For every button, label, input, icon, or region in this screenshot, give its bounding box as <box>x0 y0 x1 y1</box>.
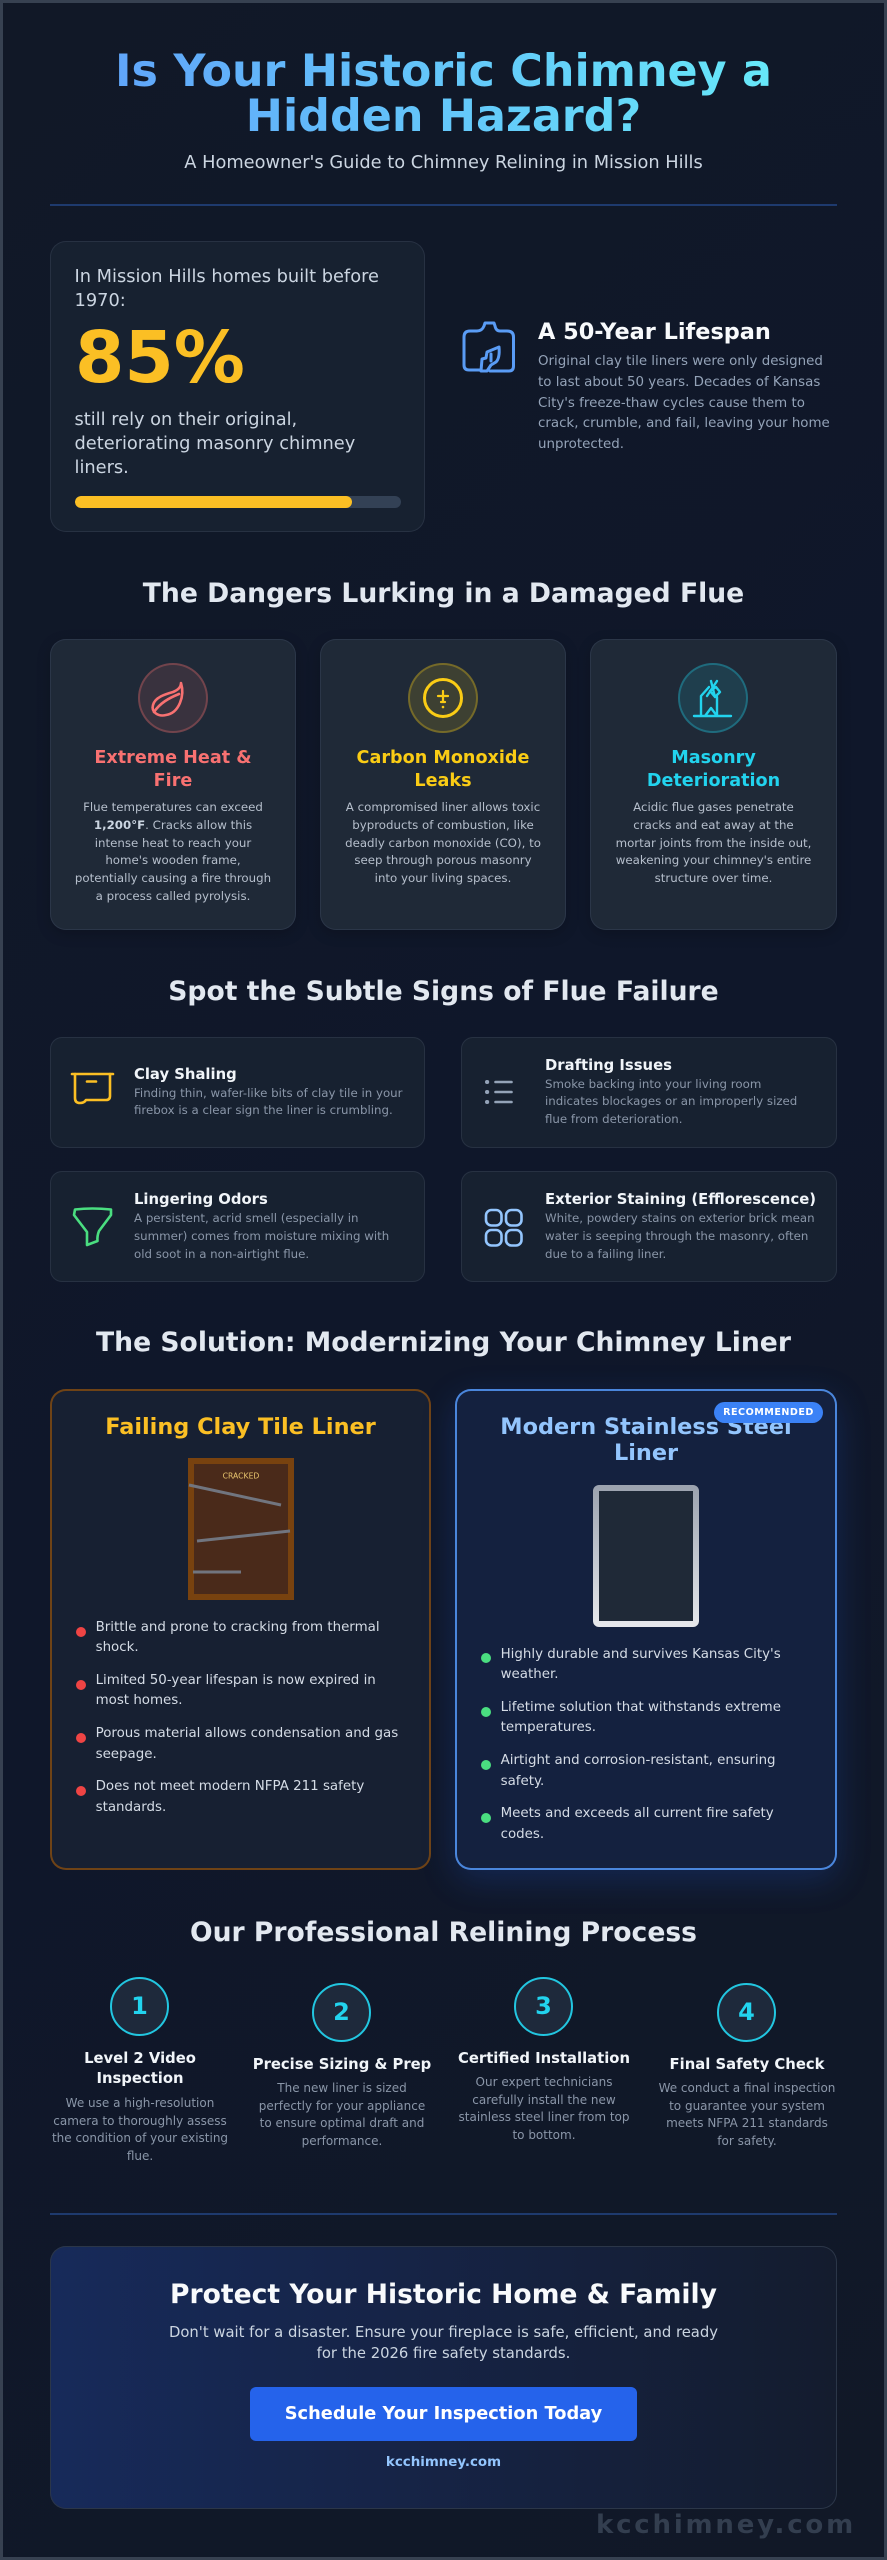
clay drawbacks list: Brittle and prone to cracking from thermal <box>96 1620 380 1634</box>
lifespan text <box>538 354 830 452</box>
odors text <box>134 1211 389 1260</box>
drafting text: flue from deterioration. <box>545 1112 683 1126</box>
step 3 number <box>514 1977 573 2036</box>
step 4 text <box>659 2081 835 2148</box>
step 1 text: We use a high-resolution <box>66 2096 214 2110</box>
step 4 text: We conduct a final inspection <box>659 2081 835 2095</box>
panel: 85% statistic <box>50 241 425 532</box>
icon: crumbling chimney <box>678 663 748 733</box>
odors text: old soot in a non-airtight flue. <box>134 1246 309 1260</box>
heat text: Flue temperatures can exceed <box>83 800 263 814</box>
step 1 <box>52 1977 228 2163</box>
lifespan text: City's freeze-thaw cycles cause them to <box>538 396 805 411</box>
heat text: 1,200°F. Cracks allow this <box>94 818 252 832</box>
watermark: kcchimney.com <box>596 2510 856 2540</box>
lifespan text: to last about 50 years. Decades of Kansas <box>538 375 820 390</box>
icon: funnel <box>72 1207 112 1246</box>
step 4 <box>659 1983 835 2148</box>
cta text <box>169 2324 718 2362</box>
heat text: intense heat to reach your <box>95 836 251 850</box>
odors text: A persistent, acrid smell (especially in <box>134 1211 359 1225</box>
masonry title: Deterioration <box>647 771 780 791</box>
step 3 text: to bottom. <box>512 2128 576 2142</box>
panel: 50-year lifespan <box>462 319 830 452</box>
carbon monoxide text: byproducts of combustion, like <box>352 818 534 832</box>
icon: gas warning <box>408 663 478 733</box>
title <box>112 50 775 140</box>
cta heading: Protect Your Historic Home & Family <box>170 2279 717 2310</box>
stat description: still rely on their original, <box>74 409 297 430</box>
step 2 number: 2 <box>333 1998 350 2026</box>
steel benefits list: codes. <box>501 1827 544 1842</box>
lifespan heading: A 50-Year Lifespan <box>538 319 771 345</box>
heat text <box>75 800 271 903</box>
staining text: water is seeping through the masonry, often <box>545 1229 808 1243</box>
panel: extreme heat and fire <box>50 639 296 930</box>
heading: dangers: The Dangers Lurking in a Damaged Flue <box>143 578 744 609</box>
step 3 text: carefully install the new <box>472 2093 616 2107</box>
step 4 number: 4 <box>738 1998 755 2026</box>
panel: carbon monoxide leaks <box>320 639 566 930</box>
clay drawbacks list: most homes. <box>96 1693 183 1708</box>
step 3 number: 3 <box>535 1992 552 2020</box>
cta text: for the 2026 fire safety standards. <box>317 2345 570 2362</box>
heading: process: Our Professional Relining Process <box>190 1917 697 1948</box>
masonry text: cracks and eat away at the <box>633 818 794 832</box>
step 2 number <box>312 1983 371 2042</box>
icon: list <box>485 1080 513 1104</box>
carbon monoxide title: Leaks <box>414 771 472 791</box>
steel benefits list: Meets and exceeds all current fire safety <box>501 1806 774 1821</box>
masonry text: weakening your chimney's entire <box>616 853 811 867</box>
heat title: Fire <box>154 771 192 791</box>
panel: call to action <box>50 2246 837 2509</box>
step 1 number <box>110 1977 169 2036</box>
step 3 <box>458 1977 630 2142</box>
steel panel title: Modern Stainless Steel <box>500 1414 792 1440</box>
stat intro text: In Mission Hills homes built before <box>74 266 379 287</box>
panel: masonry deterioration <box>590 639 837 930</box>
heading: solution: The Solution: Modernizing Your Chimney Liner <box>96 1327 791 1358</box>
cta button <box>250 2387 637 2441</box>
steel benefits list: safety. <box>501 1774 544 1789</box>
step 1 text: flue. <box>127 2149 153 2163</box>
panel: clay shaling <box>50 1037 425 1148</box>
carbon monoxide text: A compromised liner allows toxic <box>346 800 540 814</box>
drafting title: Drafting Issues <box>545 1057 672 1074</box>
heat title: Extreme Heat & <box>94 748 252 768</box>
steel benefits list: Highly durable and survives Kansas City's <box>501 1646 781 1662</box>
header <box>115 46 772 173</box>
step 1 text: the condition of your existing <box>52 2131 228 2145</box>
stat description <box>74 409 355 478</box>
title: Is Your Historic Chimney a <box>115 46 772 97</box>
heading: signs: Spot the Subtle Signs of Flue Failure <box>168 976 719 1007</box>
drafting text: indicates blockages or an improperly sized <box>545 1094 797 1108</box>
icon: chimney liner <box>462 322 515 372</box>
clay shaling title: Clay Shaling <box>134 1066 237 1083</box>
lifespan text: crack, crumble, and fail, leaving your home <box>538 416 830 431</box>
carbon monoxide title: Carbon Monoxide <box>357 748 529 768</box>
steel benefits list: Airtight and corrosion-resistant, ensuring <box>501 1753 776 1768</box>
odors text: summer) comes from moisture mixing with <box>134 1229 389 1243</box>
clay drawbacks list: Porous material allows condensation and gas <box>96 1726 398 1741</box>
masonry text: Acidic flue gases penetrate <box>633 800 794 814</box>
step 2 text: perfectly for your appliance <box>259 2099 425 2113</box>
stat description: liners. <box>74 457 129 478</box>
clay shaling text: Finding thin, wafer-like bits of clay tile in your <box>134 1086 402 1100</box>
diagram: cracked clay liner: CRACKED <box>223 1472 259 1480</box>
step 2 text: performance. <box>302 2134 382 2148</box>
diagram: steel liner <box>593 1485 699 1627</box>
panel: drafting issues <box>461 1037 837 1148</box>
steel benefits list: weather. <box>501 1667 558 1682</box>
step 1 text: camera to thoroughly assess <box>53 2114 227 2128</box>
step 1 title: Inspection <box>96 2070 184 2087</box>
step 2 title: Precise Sizing & Prep <box>253 2056 431 2072</box>
step 3 text: Our expert technicians <box>476 2075 612 2089</box>
clay drawbacks list <box>76 1620 398 1815</box>
staining title: Exterior Staining (Efflorescence) <box>545 1191 816 1208</box>
masonry text <box>616 800 811 885</box>
odors title: Lingering Odors <box>134 1191 268 1208</box>
step 2 <box>253 1983 431 2148</box>
cta button: Schedule Your Inspection Today <box>285 2403 602 2424</box>
icon: firebox <box>70 1072 114 1104</box>
step 1 title <box>84 2050 196 2087</box>
carbon monoxide text: into your living spaces. <box>375 871 511 885</box>
panel: failing clay tile liner <box>50 1389 431 1870</box>
clay drawbacks list: seepage. <box>96 1747 157 1762</box>
heat text: potentially causing a fire through <box>75 871 271 885</box>
stat intro text: 1970: <box>74 290 126 311</box>
step 2 text: to ensure optimal draft and <box>260 2116 424 2130</box>
subtitle: A Homeowner's Guide to Chimney Relining in Mission Hills <box>184 152 703 173</box>
masonry text: mortar joints from the inside out, <box>616 836 811 850</box>
badge: recommended <box>714 1402 823 1423</box>
steel benefits list <box>481 1646 781 1842</box>
step 3 text <box>459 2075 629 2142</box>
carbon monoxide text <box>345 800 541 885</box>
clay drawbacks list: Does not meet modern NFPA 211 safety <box>96 1779 364 1794</box>
carbon monoxide text: seep through porous masonry <box>354 853 532 867</box>
stat number: 85% <box>75 316 245 399</box>
progress bar <box>75 496 401 508</box>
icon: flame leaf <box>138 663 208 733</box>
clay shaling text: firebox is a clear sign the liner is crumbling. <box>134 1103 393 1117</box>
clay drawbacks list: Limited 50-year lifespan is now expired in <box>96 1672 376 1688</box>
step 4 title: Final Safety Check <box>670 2056 824 2072</box>
carbon monoxide title <box>357 748 529 791</box>
step 3 text: stainless steel liner from top <box>459 2110 629 2124</box>
step 3 title: Certified Installation <box>458 2050 630 2066</box>
title: Hidden Hazard? <box>246 91 641 142</box>
step 4 text: for safety. <box>717 2134 777 2148</box>
badge: recommended: RECOMMENDED <box>723 1407 814 1418</box>
heat title <box>94 748 252 791</box>
steel panel title: Liner <box>614 1440 678 1466</box>
steel benefits list: Lifetime solution that withstands extreme <box>501 1700 781 1714</box>
masonry text: structure over time. <box>655 871 772 885</box>
icon: grid <box>484 1208 523 1247</box>
steel benefits list: temperatures. <box>501 1720 596 1735</box>
clay drawbacks list: shock. <box>96 1640 139 1655</box>
staining text: White, powdery stains on exterior brick mean <box>545 1211 815 1225</box>
masonry title <box>647 748 780 791</box>
diagram: cracked clay liner <box>188 1458 294 1600</box>
carbon monoxide text: deadly carbon monoxide (CO), to <box>345 836 541 850</box>
lifespan text: Original clay tile liners were only designed <box>538 354 823 369</box>
panel: modern stainless steel liner <box>455 1389 837 1870</box>
step 4 text: to guarantee your system <box>669 2099 825 2113</box>
panel: lingering odors <box>50 1171 425 1282</box>
staining text: due to a failing liner. <box>545 1246 666 1260</box>
clay shaling text <box>134 1086 402 1117</box>
step 2 text: The new liner is sized <box>277 2081 407 2095</box>
step 2 text <box>259 2081 425 2148</box>
cta text: Don't wait for a disaster. Ensure your fireplace is safe, efficient, and ready <box>169 2324 718 2341</box>
website link: kcchimney.com <box>386 2455 501 2470</box>
drafting text: Smoke backing into your living room <box>545 1077 761 1091</box>
step 1 number: 1 <box>131 1992 148 2020</box>
step 4 number <box>717 1983 776 2042</box>
panel: exterior staining <box>461 1171 837 1282</box>
step 1 title: Level 2 Video <box>84 2050 196 2066</box>
drafting text <box>545 1077 797 1126</box>
step 1 text <box>52 2096 228 2163</box>
clay drawbacks list: standards. <box>96 1800 166 1815</box>
heat text: a process called pyrolysis. <box>96 889 250 903</box>
stat intro text <box>74 266 379 311</box>
heat text: home's wooden frame, <box>105 853 241 867</box>
masonry title: Masonry <box>671 748 756 768</box>
lifespan text: unprotected. <box>538 437 624 452</box>
step 4 text: meets NFPA 211 standards <box>666 2116 828 2130</box>
stat description: deteriorating masonry chimney <box>74 433 355 454</box>
clay panel title: Failing Clay Tile Liner <box>105 1414 376 1440</box>
steel panel title <box>500 1414 792 1466</box>
staining text <box>545 1211 815 1260</box>
